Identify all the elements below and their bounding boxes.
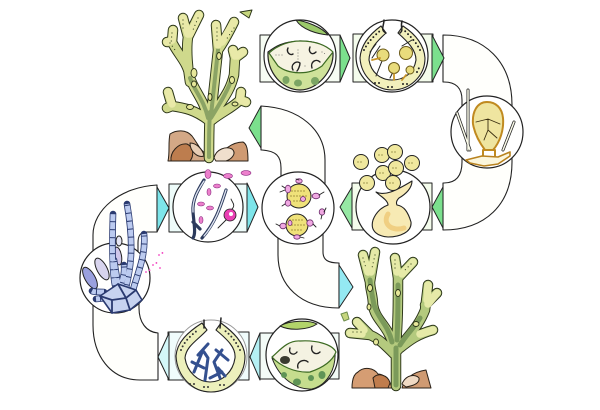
conceptacle wall — [360, 26, 425, 90]
flagella — [276, 179, 326, 238]
pouch interior — [269, 41, 333, 73]
circle: flask — [354, 144, 430, 244]
paraphyses — [457, 90, 514, 150]
circle: top pouch — [264, 20, 336, 92]
connector: upper right — [443, 35, 512, 230]
egg speckles — [289, 191, 307, 230]
thallus outline — [167, 15, 246, 158]
interior specks — [276, 50, 327, 66]
base divisions — [100, 284, 136, 313]
egg speckles — [358, 152, 415, 183]
lens cap — [280, 321, 317, 329]
frond dots — [353, 255, 411, 332]
arrow: zoospores left — [157, 187, 169, 232]
frond dots — [170, 18, 234, 50]
wall cells — [181, 330, 240, 387]
connector: centre upper — [261, 106, 325, 185]
arrow: flask to centre — [340, 187, 352, 228]
fragment — [240, 10, 252, 18]
thallus outline — [350, 252, 437, 386]
panel: lower brackets and arrows — [157, 183, 353, 380]
bracket: top pouch — [260, 35, 340, 82]
air bladders — [367, 284, 419, 345]
paraphyses — [370, 40, 412, 78]
base cells — [100, 284, 142, 313]
circle: centre fertilisation — [262, 172, 334, 244]
fragment — [341, 312, 349, 321]
thallus fill — [167, 15, 246, 158]
filaments — [290, 346, 320, 368]
air bladders — [186, 52, 238, 110]
ostiole hairs — [383, 20, 402, 33]
stalks — [372, 58, 406, 80]
circle: blue filaments — [80, 204, 164, 313]
flask shading — [386, 214, 404, 229]
pouch body — [272, 352, 335, 389]
flagella — [218, 199, 234, 228]
spores — [198, 170, 251, 224]
bracket: top conceptacle — [353, 34, 433, 82]
connector: left lower — [93, 295, 158, 380]
frond tips — [167, 15, 246, 104]
pouch spots — [281, 371, 326, 386]
pouch interior — [272, 341, 336, 372]
blue branches — [192, 344, 228, 380]
bracket: flask — [352, 183, 432, 230]
base cells — [466, 152, 510, 166]
large spore — [224, 209, 236, 221]
circle: right oogonium — [451, 90, 523, 168]
connector: centre lower — [278, 230, 339, 308]
large spore nucleus — [229, 212, 233, 216]
arrow: centre lower — [339, 265, 353, 308]
sporangia — [80, 236, 123, 291]
bracket: zoospores — [169, 184, 247, 232]
filaments — [287, 47, 320, 71]
rocks — [352, 368, 431, 388]
panel: upper brackets and arrows — [249, 34, 444, 230]
stalk — [483, 150, 495, 158]
oogonia — [377, 46, 414, 74]
oogonium — [473, 102, 503, 150]
arrow: zoospores right — [247, 183, 258, 232]
wall cells — [364, 30, 420, 87]
sperm cells — [280, 179, 325, 239]
illustration: top seaweed — [167, 10, 252, 161]
arrow: centre connector start — [249, 106, 261, 148]
filaments fill — [92, 204, 144, 299]
circle: zoospores — [173, 170, 251, 242]
circle: bottom conceptacle — [175, 318, 247, 392]
released eggs — [354, 144, 420, 190]
eggs — [287, 184, 311, 208]
arrow: bottom pouch left — [250, 333, 260, 380]
bracket: bottom conceptacle — [168, 332, 249, 380]
arrow: top pouch to conceptacle — [340, 35, 350, 82]
illustration: bottom seaweed — [341, 252, 437, 388]
conceptacle wall — [176, 323, 245, 392]
thallus fill — [350, 252, 437, 386]
thallus darker stem — [370, 280, 420, 385]
flask — [372, 181, 412, 237]
circle: top conceptacle — [356, 20, 428, 92]
ostiole hairs — [204, 318, 221, 328]
dark cluster — [280, 356, 290, 364]
circle: bottom pouch — [266, 319, 338, 391]
thallus midrib — [190, 50, 232, 157]
arrow: bottom conceptacle left — [158, 333, 169, 380]
frond tips — [350, 252, 437, 334]
rocks — [168, 131, 248, 161]
connector: left upper — [93, 185, 157, 260]
oogonium divisions — [476, 119, 500, 140]
filaments outline — [92, 204, 144, 299]
pouch body — [268, 41, 333, 90]
arrow: connector to flask — [432, 187, 443, 228]
released pink spores — [146, 252, 164, 272]
branching sporangium — [193, 180, 226, 238]
bracket: bottom pouch — [260, 333, 339, 379]
lens cap — [296, 20, 328, 35]
arrow: conceptacle to connector — [432, 35, 444, 82]
pouch spots — [282, 76, 319, 86]
